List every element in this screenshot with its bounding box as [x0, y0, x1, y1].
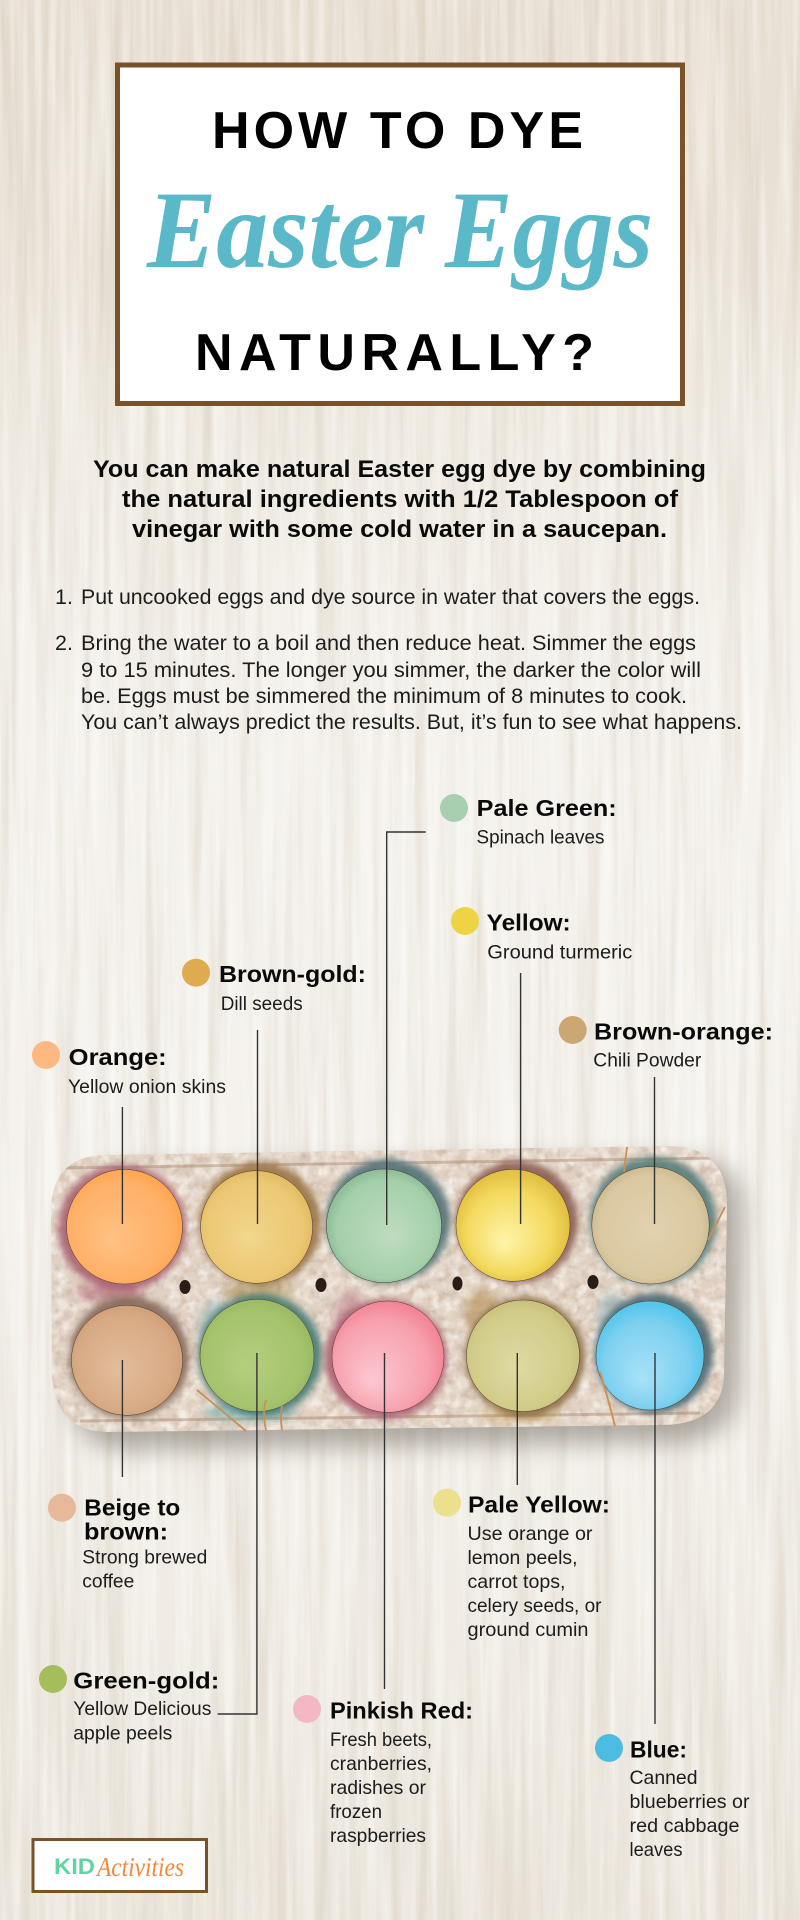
numbered steps: be. Eggs must be simmered the minimum of 8 minutes to cook. [81, 684, 687, 708]
label: orange: Orange: [69, 1044, 167, 1070]
label: pale green [440, 794, 617, 848]
label: yellow: Ground turmeric [487, 941, 633, 963]
label: pinkish red: frozen [330, 1801, 382, 1823]
label: brown-orange: Chili Powder [593, 1050, 702, 1072]
label: pale green: Spinach leaves [476, 826, 605, 848]
intro text [93, 456, 706, 543]
label: blue [595, 1734, 750, 1861]
title: how to dye: HOW TO DYE [212, 102, 583, 160]
label: brown-gold [182, 959, 366, 1015]
connector lines [122, 832, 655, 1724]
label: pinkish red: Pinkish Red: [330, 1697, 473, 1723]
label: pinkish red: cranberries, [330, 1753, 432, 1775]
label: pale yellow: Pale Yellow: [468, 1491, 610, 1517]
numbered steps: Put uncooked eggs and dye source in water that covers the eggs. [81, 585, 700, 609]
label: pinkish red: Fresh beets, [330, 1729, 432, 1751]
eggs [66, 1167, 709, 1415]
logo: kid activities [33, 1840, 206, 1892]
label: pale yellow: carrot tops, [468, 1571, 566, 1593]
label: pale yellow [433, 1489, 610, 1641]
title: naturally: NATURALLY? [195, 324, 594, 382]
carton shadow [65, 1160, 742, 1450]
label: green-gold: Green-gold: [73, 1667, 219, 1693]
egg carton [45, 1140, 742, 1450]
label: pale yellow: lemon peels, [468, 1547, 578, 1569]
carton rim [60, 1158, 720, 1421]
label: orange [32, 1041, 226, 1098]
carton body [51, 1146, 727, 1432]
numbered steps: 2. [55, 631, 73, 655]
label: pinkish red: raspberries [330, 1825, 426, 1847]
title: easter eggs script [146, 169, 653, 291]
label: blue: blueberries or [630, 1791, 750, 1813]
label: beige to brown [48, 1494, 207, 1592]
intro text: You can make natural Easter egg dye by combining [93, 456, 706, 483]
label: beige to brown: brown: [84, 1518, 168, 1544]
label: blue: leaves [630, 1839, 683, 1861]
label: brown-orange [559, 1016, 773, 1072]
label: brown-orange: Brown-orange: [594, 1018, 773, 1044]
label: pinkish red: radishes or [330, 1777, 426, 1799]
label: pale green: Pale Green: [477, 795, 617, 821]
logo: kid activities: KID [54, 1854, 95, 1879]
label: pale yellow: Use orange or [468, 1523, 593, 1545]
label: pinkish red [293, 1695, 473, 1847]
carton holes [180, 1275, 598, 1294]
label: green-gold: Yellow Delicious [73, 1698, 212, 1720]
label: beige to brown: coffee [82, 1570, 134, 1592]
label: pale yellow: celery seeds, or [468, 1595, 602, 1617]
straw strands [197, 1147, 725, 1431]
title: easter eggs script: Eggs [444, 169, 653, 291]
intro text: vinegar with some cold water in a saucepan. [132, 516, 667, 543]
label: orange: Yellow onion skins [68, 1076, 226, 1098]
label: pale yellow: ground cumin [468, 1619, 588, 1641]
label: green-gold [39, 1665, 219, 1744]
label: blue: red cabbage [630, 1815, 740, 1837]
label: beige to brown: Strong brewed [82, 1546, 207, 1568]
numbered steps: 1. [55, 585, 73, 609]
label: green-gold: apple peels [73, 1722, 173, 1744]
label: blue: Canned [630, 1767, 698, 1789]
egg wells [58, 1157, 716, 1419]
title: easter eggs script: Easter [146, 169, 425, 291]
numbered steps: You can’t always predict the results. But, it’s fun to see what happens. [81, 710, 742, 734]
title panel [118, 65, 682, 404]
numbered steps: Bring the water to a boil and then reduce heat. Simmer the eggs [81, 631, 696, 655]
label: yellow [451, 907, 633, 963]
carton stains [76, 1283, 626, 1420]
label: beige to brown: Beige to [84, 1494, 180, 1520]
label: brown-gold: Dill seeds [221, 993, 303, 1015]
logo: kid activities: Activities [95, 1852, 184, 1882]
intro text: the natural ingredients with 1/2 Tablespoon of [122, 486, 679, 513]
label: brown-gold: Brown-gold: [219, 961, 366, 987]
numbered steps: 9 to 15 minutes. The longer you simmer, the darker the color will [81, 658, 701, 682]
label: yellow: Yellow: [487, 910, 571, 936]
label: blue: Blue: [630, 1736, 687, 1762]
numbered steps [55, 585, 742, 734]
